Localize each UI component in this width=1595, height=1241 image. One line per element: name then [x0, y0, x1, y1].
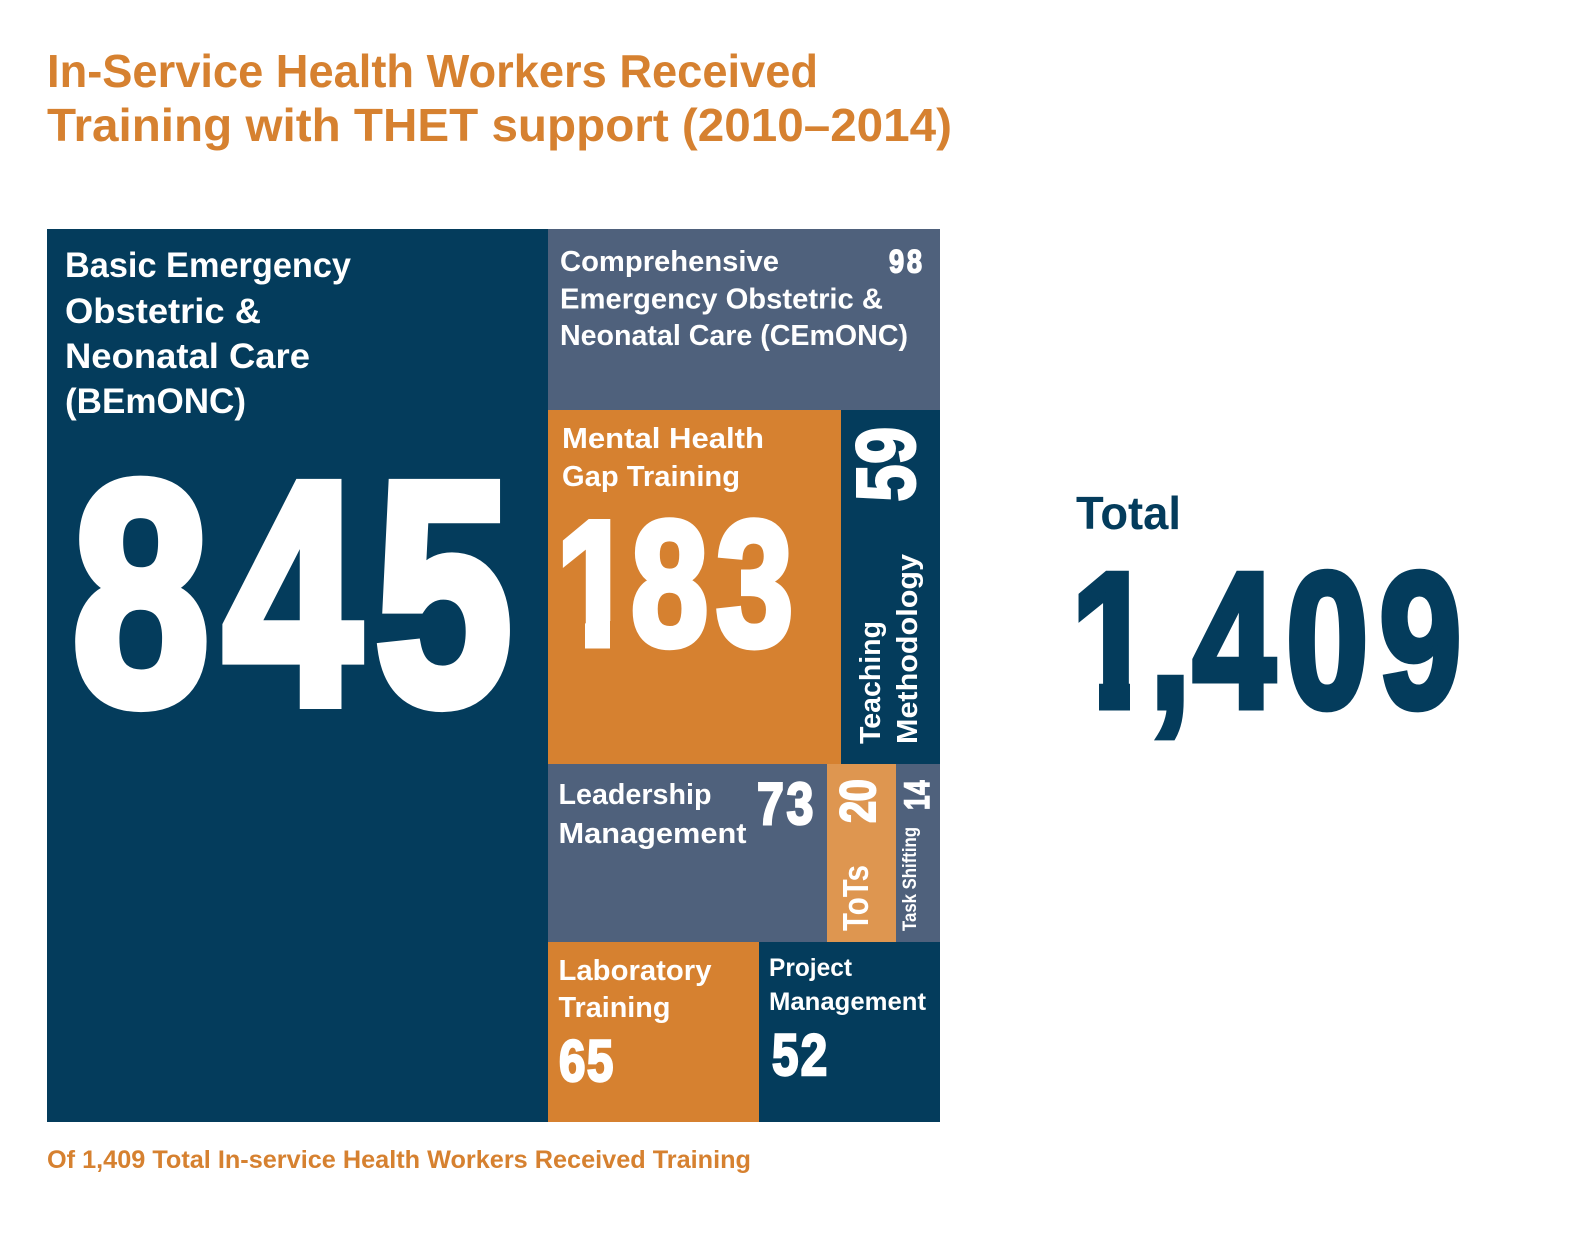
- panel: CEmONC 98: 98: [889, 244, 922, 280]
- panel: Mental Health Gap Training 183: Mental Health: [562, 423, 764, 455]
- panel: Mental Health Gap Training 183: [548, 410, 841, 764]
- title: Training with THET support (2010–2014): [47, 99, 952, 151]
- panel: Mental Health Gap Training 183: 183: [556, 484, 793, 683]
- panel: BEmONC 845: Obstetric &: [65, 292, 261, 331]
- title: [47, 45, 952, 151]
- panel: Teaching Methodology 59: 59: [839, 427, 932, 502]
- total number: 1,409: [1071, 532, 1462, 748]
- panel: CEmONC 98: Neonatal Care (CEmONC): [560, 320, 908, 352]
- panel: BEmONC 845: [47, 229, 548, 1122]
- footnote: Of 1,409 Total In-service Health Workers Received Training: [47, 1146, 751, 1174]
- panel: CEmONC 98: [548, 229, 940, 410]
- panel: BEmONC 845: 845: [72, 418, 512, 771]
- panel: Teaching Methodology 59: [839, 410, 940, 764]
- panel: Teaching Methodology 59: Methodology: [892, 554, 924, 744]
- panel: Leadership Management 73: 73: [757, 772, 813, 837]
- panel: Leadership Management 73: Leadership: [558, 779, 712, 811]
- panel: BEmONC 845: (BEmONC): [65, 382, 246, 421]
- panel: Project Management 52: Management: [769, 988, 927, 1016]
- panel: Project Management 52: 52: [772, 1024, 827, 1088]
- panel: BEmONC 845: Neonatal Care: [65, 337, 310, 376]
- panel: Laboratory Training 65: Training: [558, 992, 670, 1024]
- panel: Laboratory Training 65: Laboratory: [558, 955, 712, 987]
- panel: Project Management 52: Project: [769, 954, 853, 982]
- total label: Total: [1076, 487, 1181, 539]
- panel: Task Shifting 14: [896, 764, 940, 942]
- panel: BEmONC 845: Basic Emergency: [65, 246, 352, 285]
- panel: Laboratory Training 65: 65: [559, 1030, 613, 1094]
- panel: ToTs 20: ToTs: [835, 865, 876, 931]
- panel: Mental Health Gap Training 183: Gap Training: [562, 461, 740, 493]
- panel: ToTs 20: 20: [830, 779, 886, 823]
- panel: Leadership Management 73: [548, 764, 827, 942]
- panel: CEmONC 98: Emergency Obstetric &: [560, 284, 883, 316]
- panel: CEmONC 98: Comprehensive: [560, 246, 779, 278]
- panel: ToTs 20: [827, 764, 896, 942]
- treemap chart: [47, 229, 940, 1122]
- title: In-Service Health Workers Received: [47, 45, 818, 97]
- panel: Laboratory Training 65: [548, 942, 759, 1122]
- panel: Teaching Methodology 59: Teaching: [855, 621, 887, 744]
- panel: Project Management 52: [759, 942, 940, 1122]
- panel: Leadership Management 73: Management: [558, 818, 747, 850]
- panel: Task Shifting 14: Task Shifting: [900, 827, 921, 931]
- panel: Task Shifting 14: 14: [897, 780, 937, 810]
